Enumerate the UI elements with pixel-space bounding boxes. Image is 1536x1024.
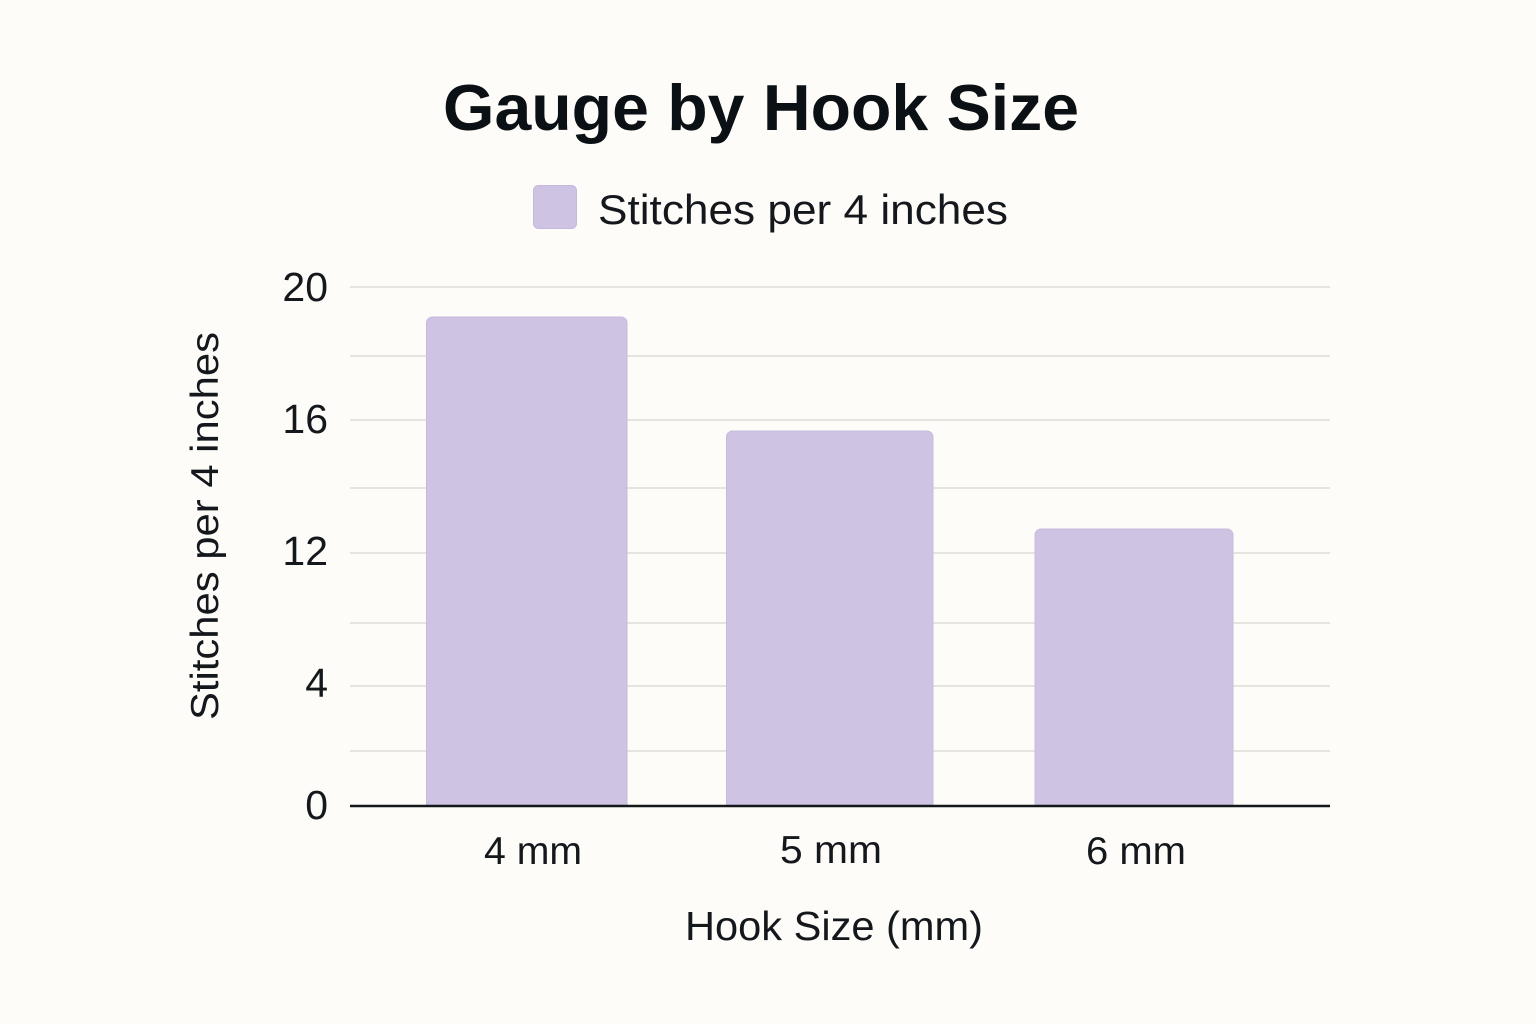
y-axis title: Stitches per 4 inches [184, 332, 227, 720]
legend label: Stitches per 4 inches [598, 186, 1008, 233]
x-axis tick labels: 6 mm [1086, 830, 1186, 873]
x-axis tick labels [484, 829, 1186, 873]
gridlines [350, 287, 1330, 751]
y-axis tick labels: 12 [282, 528, 328, 574]
y-axis tick labels: 20 [282, 264, 328, 310]
x-axis line [350, 805, 1330, 807]
y-axis tick labels: 0 [305, 782, 328, 828]
legend [534, 186, 1008, 233]
bar: 6 mm [1035, 529, 1233, 805]
x-axis title: Hook Size (mm) [685, 903, 983, 949]
x-axis tick labels: 4 mm [484, 830, 582, 873]
y-axis tick labels [282, 264, 328, 828]
y-axis tick labels: 16 [282, 396, 328, 442]
title: Gauge by Hook Size [443, 71, 1079, 144]
bar: 4 mm [426, 317, 627, 805]
bars [426, 317, 1233, 805]
legend swatch [534, 186, 576, 228]
y-axis tick labels: 4 [305, 660, 328, 706]
bar: 5 mm [726, 431, 933, 805]
x-axis tick labels: 5 mm [780, 829, 882, 872]
